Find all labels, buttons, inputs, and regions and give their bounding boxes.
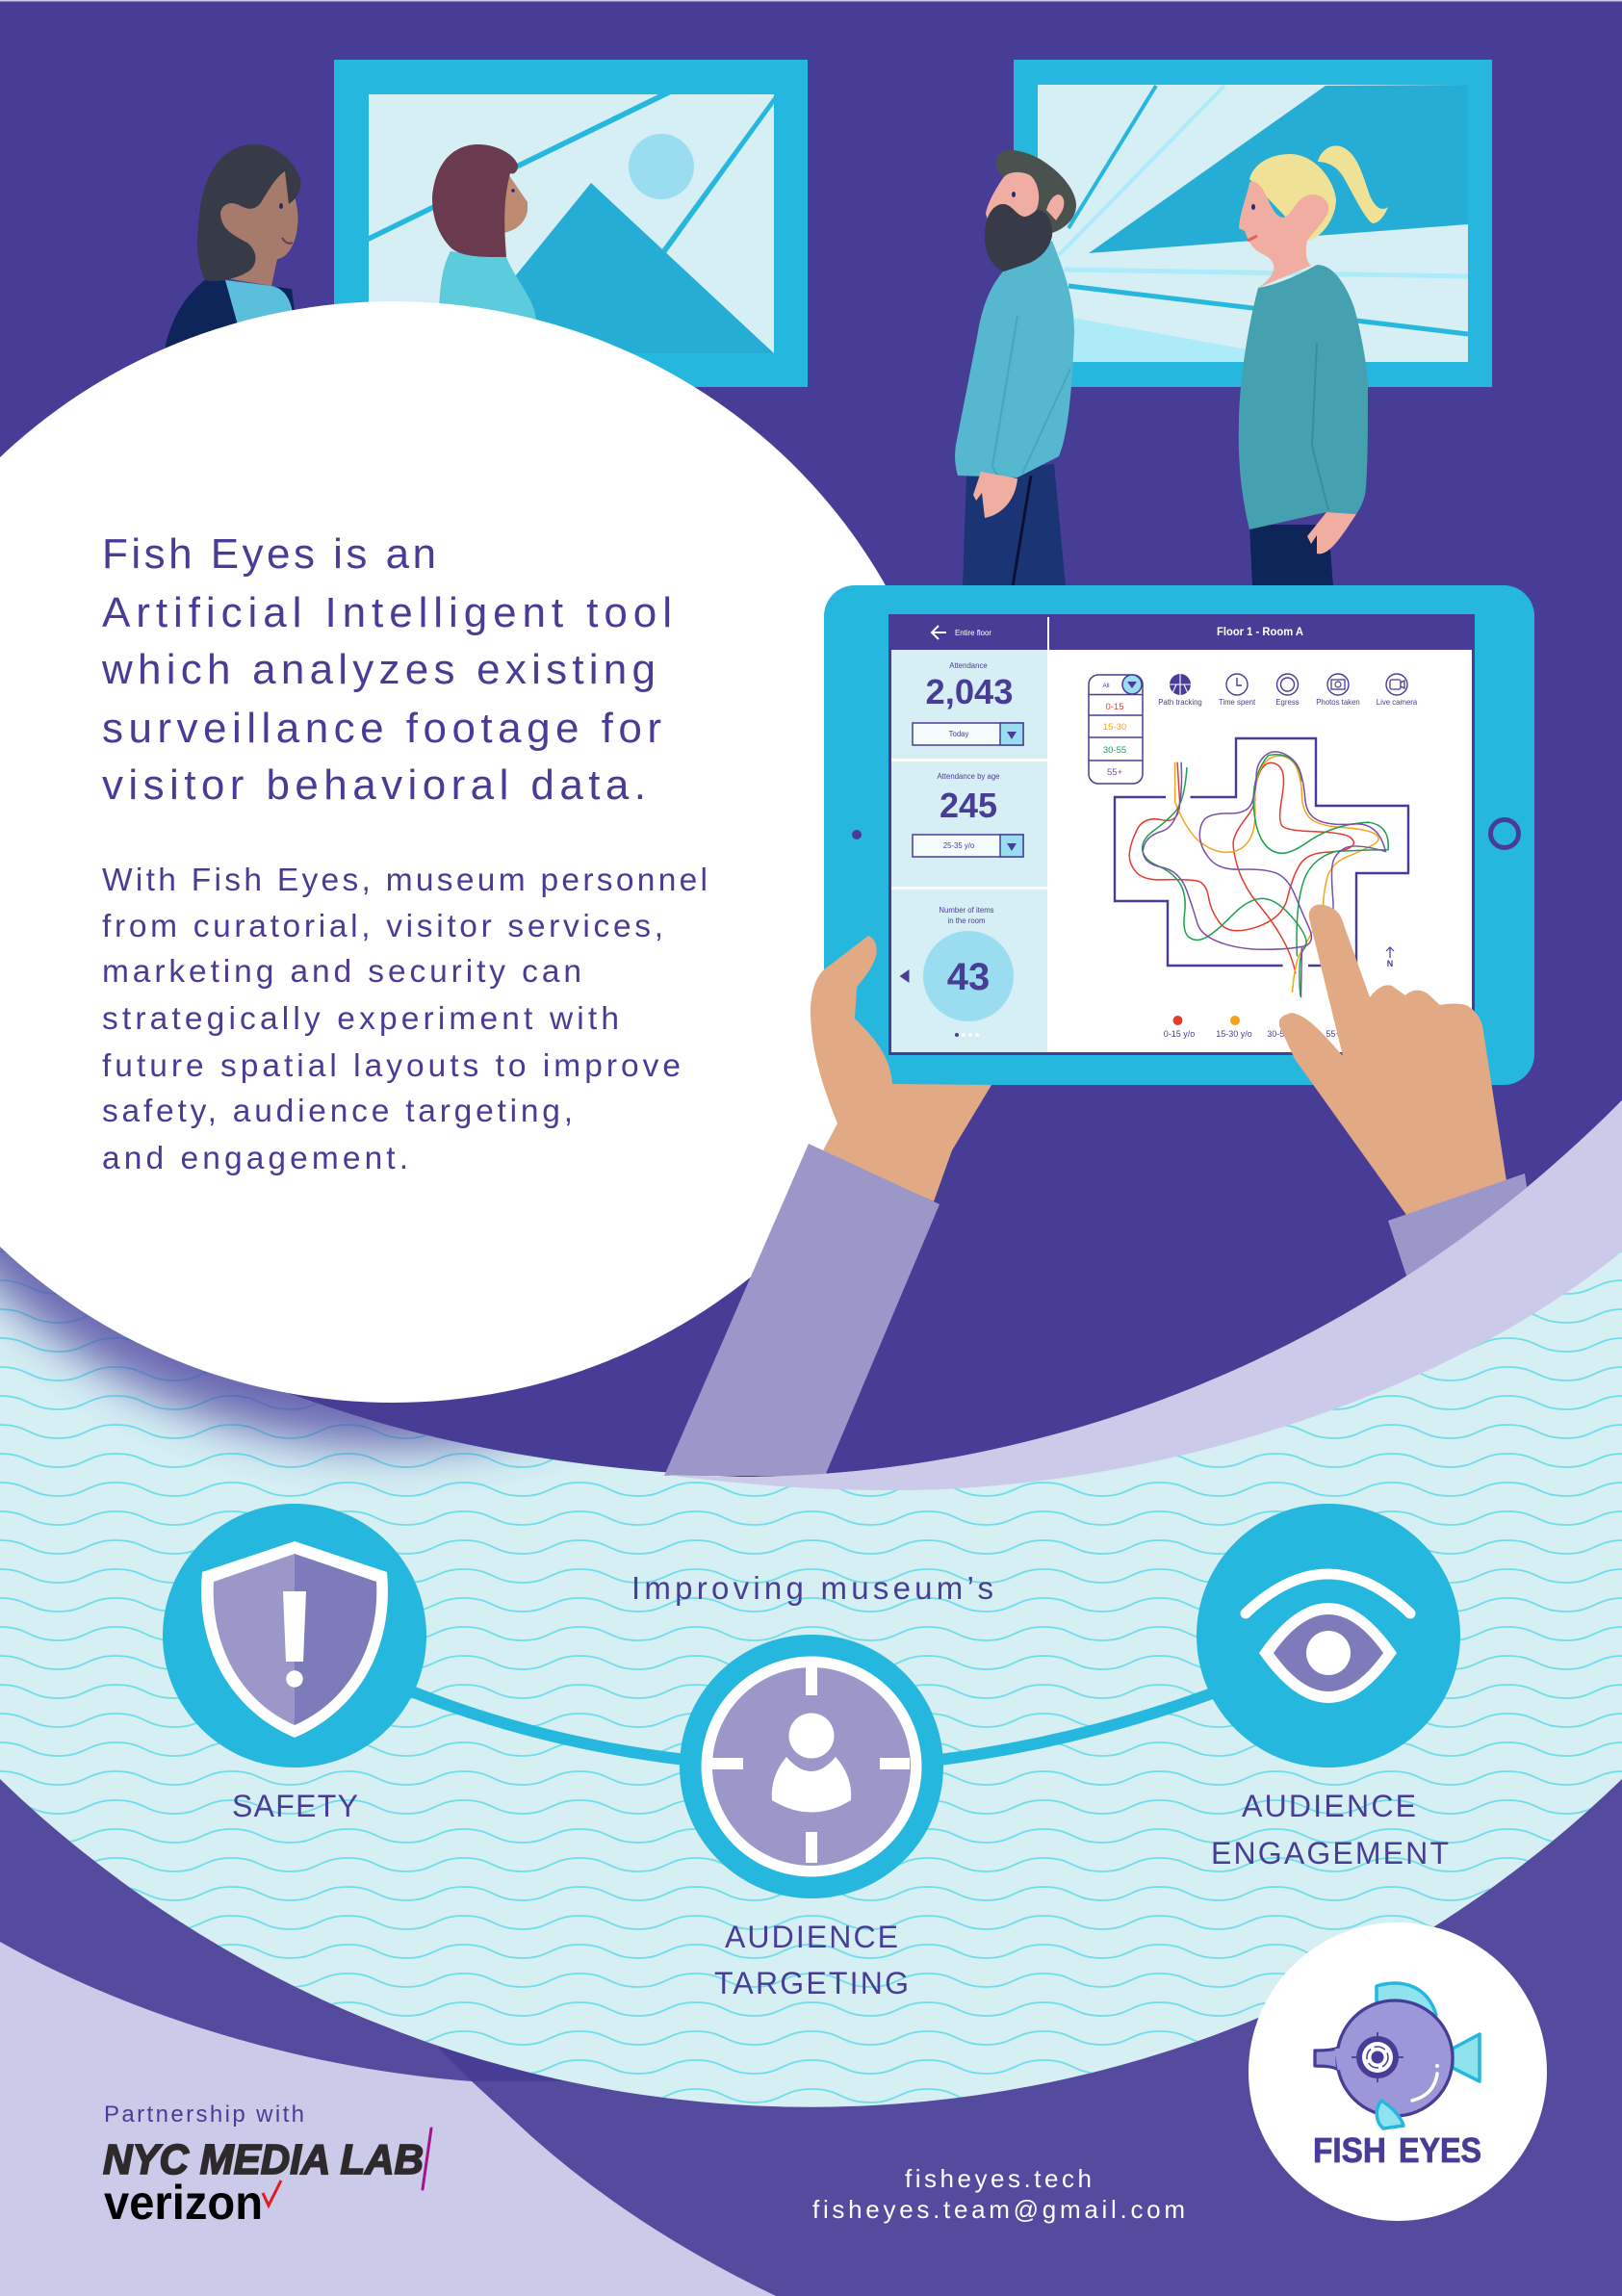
- label: audience targeting: AUDIENCE: [725, 1920, 898, 1954]
- headline text: Fish Eyes is an: [102, 530, 436, 578]
- right sleeve: [1388, 1174, 1531, 1290]
- top fin: [1377, 1983, 1436, 2015]
- lens overlap: [438, 2041, 578, 2081]
- age filter: 55+: [1107, 767, 1123, 778]
- home button: [1490, 820, 1519, 847]
- highlight: [1412, 2074, 1437, 2101]
- tool icons: [1158, 674, 1418, 707]
- mountain: [452, 183, 774, 353]
- trousers: [963, 464, 1066, 586]
- tool icons: Live camera: [1377, 698, 1418, 707]
- age filter: 15-30: [1103, 722, 1126, 733]
- right hand: [1279, 905, 1506, 1215]
- person: woman left: [164, 144, 318, 501]
- wave panel: [0, 1100, 1622, 2107]
- header: Entire floor: [955, 629, 991, 637]
- ponytail: [1318, 145, 1388, 223]
- camera dot: [852, 830, 862, 839]
- hand: [973, 472, 1017, 518]
- age filter: 0-15: [1105, 702, 1124, 712]
- screen: [888, 614, 1475, 1055]
- items in room stat: in the room: [947, 916, 986, 925]
- headline text: which analyzes existing: [101, 646, 656, 693]
- logo: verizon: verizon: [104, 2176, 263, 2230]
- head hair: [1249, 154, 1336, 241]
- age filter: [1089, 675, 1143, 784]
- floor plan: [1115, 738, 1408, 966]
- person: woman in frame: [432, 144, 539, 385]
- attendance by age stat: Attendance by age: [937, 772, 1000, 781]
- legend: 0-15 y/o: [1164, 1029, 1195, 1039]
- header: Floor 1 - Room A: [1217, 627, 1303, 638]
- contact details: [812, 2164, 1185, 2224]
- attendance stat: 2,043: [926, 672, 1013, 711]
- hand: [1307, 512, 1356, 554]
- shirt: [955, 241, 1074, 477]
- tablet: [824, 585, 1534, 1085]
- tail fin: [1453, 2034, 1480, 2081]
- tool icons: Photos taken: [1316, 698, 1360, 707]
- wordmark: FISH: [1313, 2130, 1386, 2170]
- body text: marketing and security can: [102, 954, 581, 990]
- label: audience engagement: [1211, 1789, 1449, 1870]
- label: safety: SAFETY: [232, 1789, 358, 1823]
- north arrow: [1386, 947, 1394, 968]
- contact details: fisheyes.tech: [905, 2164, 1092, 2193]
- legend: 30-55 y/o: [1267, 1029, 1303, 1039]
- age filter: All: [1102, 683, 1110, 689]
- moon: [629, 134, 694, 199]
- partnership text: Partnership with: [104, 2102, 304, 2128]
- legend: 15-30 y/o: [1216, 1029, 1252, 1039]
- north arrow: N: [1387, 959, 1393, 968]
- tool icons: Time spent: [1219, 698, 1256, 707]
- heading: improving museum's: Improving museum’s: [631, 1570, 993, 1606]
- icon: eye: [1197, 1504, 1460, 1767]
- visitor paths: [1129, 752, 1388, 997]
- left sleeve: [664, 1144, 940, 1476]
- fish eyes logo: [1249, 1922, 1547, 2221]
- headline text: [101, 530, 672, 809]
- bottom dark purple panel: [0, 1733, 1622, 2296]
- label: audience targeting: TARGETING: [714, 1966, 909, 2000]
- items in room stat: 43: [947, 956, 990, 998]
- headline text: surveillance footage for: [102, 705, 661, 752]
- painting frame right: [1014, 60, 1492, 387]
- logo: NYC Media Lab: NYC MEDIA LAB: [103, 2136, 424, 2183]
- beard: [985, 204, 1052, 271]
- body text: future spatial layouts to improve: [102, 1048, 681, 1084]
- attendance by age stat: 25-35 y/o: [943, 841, 975, 850]
- label: audience targeting: [714, 1920, 909, 2000]
- shadow of white circle: [0, 1247, 551, 1479]
- attendance by age stat: [913, 772, 1023, 857]
- hair: [996, 150, 1076, 233]
- wordmark: [1313, 2130, 1481, 2170]
- body text: and engagement.: [102, 1141, 408, 1176]
- body text: safety, audience targeting,: [102, 1094, 573, 1129]
- tool icons: Egress: [1275, 698, 1300, 707]
- face: [986, 172, 1039, 219]
- icon: audience target: [680, 1635, 943, 1898]
- legend: 55+: [1326, 1029, 1341, 1039]
- items in room stat: [899, 906, 1014, 1037]
- age filter: 30-55: [1103, 745, 1126, 756]
- connector lines: [409, 1690, 1215, 1760]
- attendance stat: Attendance: [949, 661, 988, 670]
- tool icons: Path tracking: [1158, 698, 1202, 707]
- bottom fin: [1377, 2101, 1403, 2128]
- diagonal line: [661, 96, 774, 253]
- person: bearded man: [955, 150, 1076, 586]
- body text: strategically experiment with: [102, 1001, 619, 1037]
- items in room stat: Number of items: [939, 906, 994, 915]
- bottom-left lavender panel: [0, 1942, 776, 2296]
- wordmark: EYES: [1399, 2130, 1481, 2170]
- headline text: Artificial Intelligent tool: [102, 589, 672, 636]
- painting frame left: [334, 60, 808, 387]
- label: audience engagement: AUDIENCE: [1242, 1789, 1416, 1823]
- attendance stat: Today: [949, 730, 969, 738]
- attendance by age stat: 245: [940, 786, 997, 825]
- headline text: visitor behavioral data.: [102, 761, 646, 809]
- fish eye: [1352, 2032, 1403, 2082]
- body text: [102, 863, 708, 1176]
- header: [932, 626, 1303, 639]
- blue triangle: [1089, 85, 1468, 253]
- label: audience engagement: ENGAGEMENT: [1211, 1836, 1449, 1870]
- face and neck: [1239, 181, 1328, 288]
- icon: safety shield: [163, 1504, 426, 1767]
- person: blonde woman: [1239, 145, 1388, 586]
- sweater: [1239, 265, 1368, 529]
- attendance stat: [913, 661, 1023, 745]
- trousers: [1249, 525, 1333, 586]
- legend: [1164, 1016, 1341, 1039]
- body text: With Fish Eyes, museum personnel: [102, 863, 708, 898]
- left hand: [811, 936, 991, 1201]
- lavender band: [664, 1100, 1622, 1490]
- body text: from curatorial, visitor services,: [102, 909, 663, 944]
- white circle: [0, 301, 956, 1403]
- contact details: fisheyes.team@gmail.com: [812, 2195, 1185, 2224]
- fish body: [1315, 2048, 1338, 2070]
